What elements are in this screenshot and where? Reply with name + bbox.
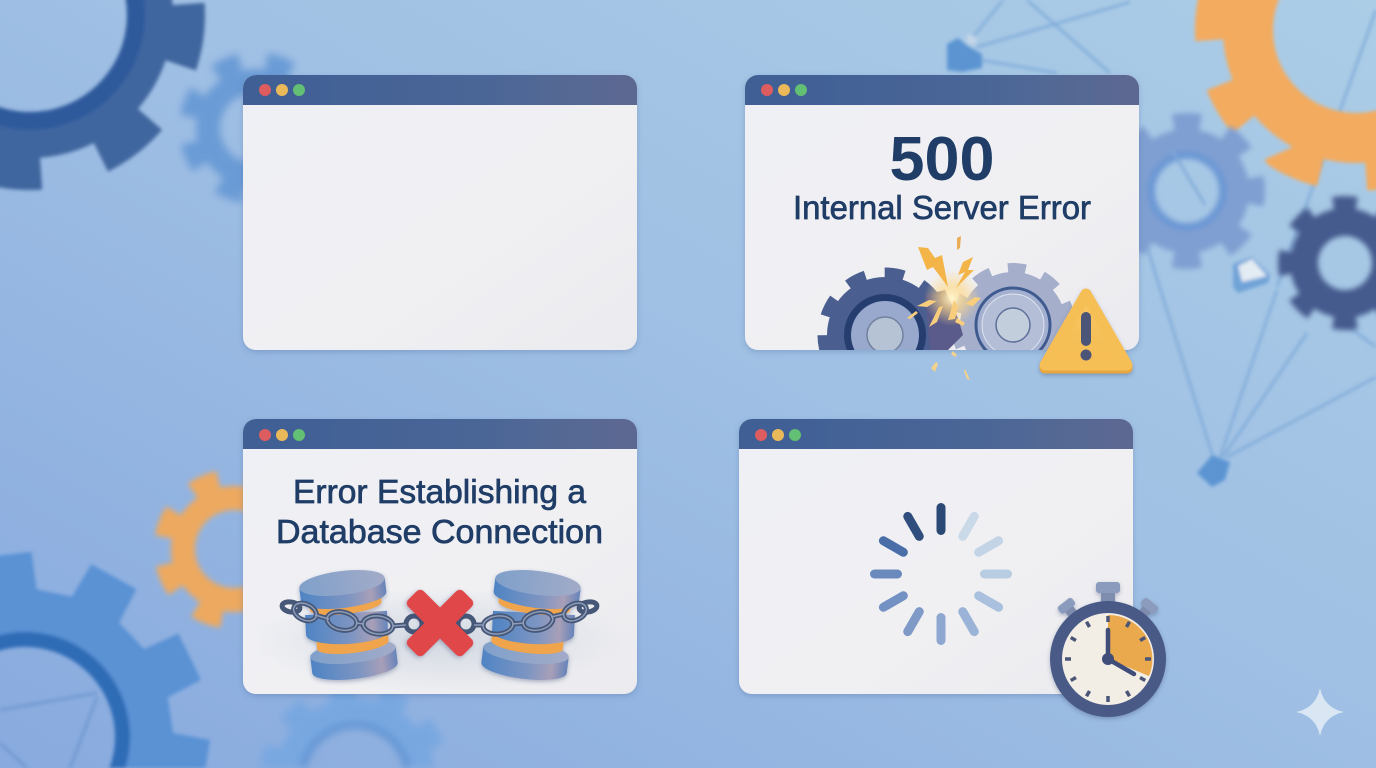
background gear: orange lower left — [152, 467, 316, 631]
panel: database error browser window — [243, 419, 637, 694]
text: database error heading: Database Connection — [276, 513, 603, 550]
icon: red X — [385, 568, 495, 678]
icon: sparkle — [1296, 688, 1344, 736]
soft shadow under databases — [250, 588, 630, 692]
icon: sparks and lightning — [907, 236, 981, 380]
icon: left chain — [281, 600, 422, 636]
icon: warning triangle — [1045, 294, 1127, 368]
background gear: dark blue top left — [0, 0, 198, 183]
icon: loading spinner — [874, 508, 1008, 640]
background gear: light blue top left — [179, 52, 331, 204]
heading: 500: 500 — [890, 125, 994, 194]
background gear: blue bottom left — [0, 552, 210, 768]
background network lines — [947, 0, 1376, 487]
icon: stopwatch — [1050, 582, 1166, 717]
icon: left database — [298, 566, 399, 684]
background gear: blue right — [1107, 111, 1267, 271]
background gear: orange top right — [1156, 0, 1376, 230]
panel: loading browser window — [739, 419, 1133, 694]
background gear inner strut — [1172, 150, 1205, 205]
icon: right chain — [458, 600, 598, 636]
icon: right database — [480, 566, 582, 684]
panel: blank browser window — [243, 75, 637, 350]
text: database error heading — [276, 473, 603, 550]
text: Internal Server Error: Internal Server Error — [793, 189, 1091, 226]
background gear: blue bottom centre — [260, 682, 444, 768]
background gear: dark right — [1276, 194, 1376, 332]
panel: 500 error browser window — [745, 75, 1139, 350]
text: database error heading: Error Establishing a — [293, 473, 587, 510]
icon: broken gears — [818, 263, 1072, 350]
